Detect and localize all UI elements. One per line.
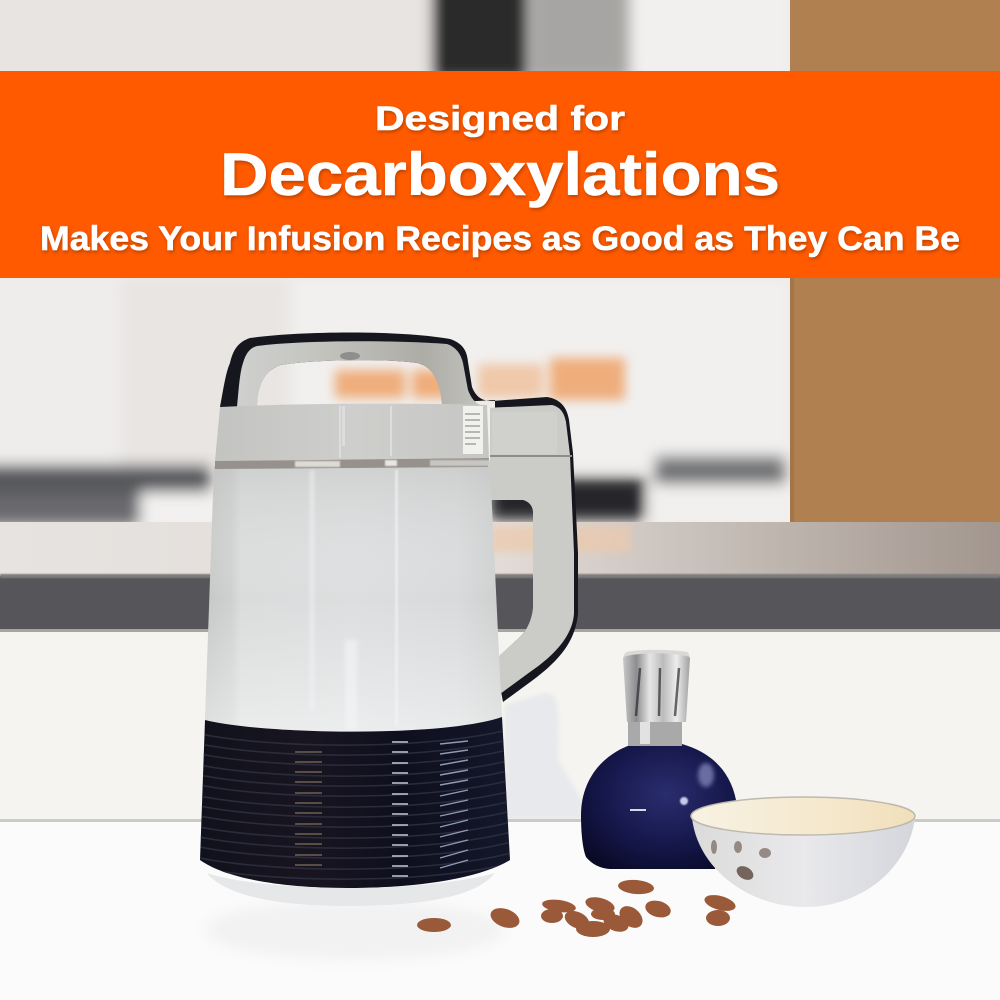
lamp glass crown: [623, 651, 690, 722]
label sticker: [463, 406, 483, 454]
lamp sphere: [581, 744, 736, 869]
vent holes on handle: [340, 352, 360, 360]
white foot: [207, 873, 495, 906]
top carrying handle: [237, 341, 485, 420]
orange banner: [0, 71, 1000, 278]
ribbed black base: [195, 717, 515, 888]
countertop: [0, 522, 1000, 578]
heading: decarboxylations: Decarboxylations: [220, 141, 780, 208]
white table: [0, 820, 1000, 1000]
metal ring: [215, 458, 489, 469]
side mug handle: [484, 405, 574, 694]
almonds: [417, 878, 737, 937]
lid reflections: [339, 406, 392, 458]
rib highlights: [295, 752, 322, 865]
oil lamp: [581, 650, 736, 869]
lid shoulder highlight: [492, 412, 557, 454]
blurred orange lettering: [335, 358, 625, 400]
soymilk maker appliance: [195, 332, 578, 906]
heading: designed for: Designed for: [375, 100, 625, 138]
cabinet front: [0, 632, 1000, 820]
lamp collar: [628, 716, 682, 746]
lamp highlights: [630, 763, 714, 811]
lid: [215, 404, 489, 461]
kettle shadow on cabinet: [505, 693, 582, 820]
black outer trim of handles: [220, 332, 578, 702]
body reflections: [310, 470, 398, 730]
bowl: [691, 797, 915, 907]
subheading: Makes Your Infusion Recipes as Good as They Can Be: [40, 220, 960, 258]
wood panel: [790, 0, 1000, 522]
main body: [205, 466, 502, 732]
